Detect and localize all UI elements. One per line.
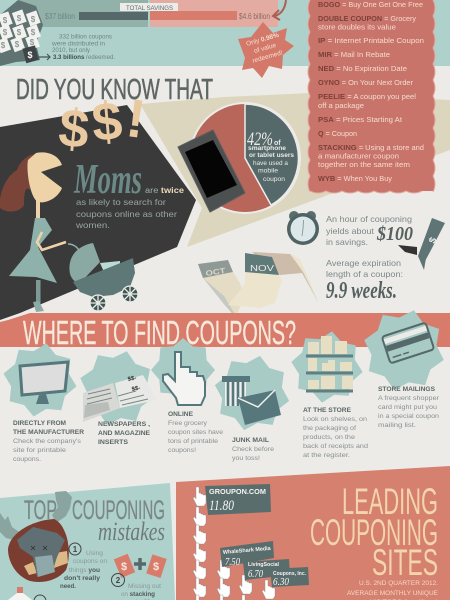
Oct page [203, 272, 244, 316]
illustration: mom [0, 152, 66, 312]
text: THE MANUFACTURER [13, 429, 84, 436]
text: STORE MAILINGS [378, 386, 436, 393]
text: coupons distributed: 3.3 billions redeemed. [53, 54, 115, 61]
text: back of receipts and [303, 443, 368, 450]
hood [69, 243, 100, 283]
foot [33, 301, 44, 312]
left antler [0, 513, 22, 541]
pie text: have used a [253, 161, 289, 167]
icon: trash and envelope [207, 348, 297, 438]
icon: magazine: $$- [127, 376, 137, 383]
glossary text: off a package [318, 101, 364, 110]
subheading [347, 580, 438, 600]
panel: tan backdrop [140, 93, 450, 247]
text: JUNK MAIL [232, 437, 269, 444]
Nov page [228, 272, 282, 308]
value box: Coupons, Inc.: 6.30 [273, 576, 289, 588]
hand bar: Coupons, Inc. [262, 580, 275, 599]
icon: monitor [0, 337, 83, 423]
text: hour of couponing: in savings. [326, 237, 368, 247]
icon: coupon pile: $ [31, 15, 36, 24]
text: the packaging of [303, 425, 356, 432]
value box: WhaleShark Media: 7.50 [225, 556, 240, 568]
mistake 1 [60, 543, 107, 590]
text: you toss! [232, 455, 260, 462]
text: coupons distributed: were distributed in [51, 40, 105, 48]
panel: dark backdrop [0, 105, 196, 320]
icon: coupon pile: $ [3, 16, 8, 25]
mistake 2: Missing out [128, 583, 161, 590]
mistake 2: on stacking [121, 591, 155, 598]
arm [37, 232, 66, 250]
tan mounts [24, 562, 37, 575]
small arrow [37, 54, 50, 60]
icon: coupon pile: $ [30, 38, 35, 47]
text: at the register. [303, 452, 350, 459]
callout: redeemed star: of value [253, 42, 277, 55]
text: hour of couponing: $100 [376, 223, 413, 245]
icon: dollar bill: $ [427, 235, 440, 245]
text: card might put you [378, 404, 437, 411]
pie slice: 42% [245, 104, 298, 205]
card: store mailings [354, 300, 450, 429]
icon: magazine [70, 341, 164, 435]
text: coupon sites have [168, 429, 223, 436]
value box: WhaleShark Media [220, 541, 274, 568]
text [232, 437, 274, 462]
illustration: stroller [68, 243, 138, 311]
heading: dollar signs [56, 88, 149, 160]
subheading: AVERAGE MONTHLY UNIQUE [347, 590, 438, 597]
hand bar: Groupon [193, 487, 206, 600]
text: moms: Moms [73, 157, 142, 203]
leg [36, 280, 40, 304]
redeemed coupon: $ [27, 50, 33, 60]
glossary text: MIR = Mail In Rebate [318, 50, 390, 59]
basket [73, 258, 135, 297]
icon: coupon pile: $ [17, 14, 22, 23]
glossary text: OYNO = On Your Next Order [318, 78, 413, 87]
savings band left [19, 0, 148, 27]
heading: dollar signs: ! [123, 88, 149, 150]
value box: Coupons, Inc. [270, 567, 309, 588]
text: Look on shelves, on [303, 416, 367, 423]
glossary text: a manufacturer coupon [318, 152, 399, 160]
icon: clock [287, 211, 319, 245]
scalloped edges [308, 0, 435, 193]
value label left: $37 billion [45, 12, 75, 21]
arrow to redeemed star [273, 0, 286, 20]
pie chart: 42 percent [189, 102, 301, 214]
text: coupons. [13, 456, 41, 463]
heading: did you know that: DID YOU KNOW THAT [16, 74, 213, 106]
subheading: U.S. 2ND QUARTER 2012. [359, 580, 438, 587]
icon: dollar bill [398, 218, 445, 270]
text: coupons! [168, 447, 196, 454]
dress [9, 218, 57, 283]
text [168, 411, 223, 454]
back page [252, 252, 318, 302]
card: online [151, 338, 223, 454]
mistake 1: need. [60, 583, 76, 590]
mistake 1: things you [69, 567, 100, 574]
panel: top teal band [0, 0, 450, 66]
glossary text: together on the same item [318, 160, 410, 169]
icon: smartphone [178, 130, 245, 212]
savings band right [150, 0, 278, 27]
text: products, on the [303, 434, 355, 441]
text: Free grocery [168, 420, 208, 427]
right antler [52, 491, 72, 523]
icon: pointer hand [151, 338, 215, 405]
text: coupons distributed: 332 billion coupons [59, 34, 112, 40]
pie text: 42% [247, 129, 273, 150]
heading [310, 481, 438, 583]
text: moms: women. [75, 220, 110, 230]
mistake 2 [112, 574, 161, 600]
text [98, 421, 151, 446]
panel: leading couponing sites [176, 466, 450, 600]
hair [0, 154, 36, 212]
heading: mistakes: mistakes [98, 517, 165, 546]
text: moms [73, 157, 185, 230]
plaque [8, 519, 69, 582]
icon: shelves [286, 326, 368, 408]
text: hour of couponing: yields about [326, 226, 375, 236]
text: A frequent shopper [378, 395, 440, 402]
text: site for printable [13, 447, 66, 454]
head [17, 527, 65, 577]
icon: coupon pile [0, 0, 50, 66]
icon: stacking coupons: $ [121, 561, 127, 573]
callout: redeemed star: redeemed! [252, 49, 284, 65]
glossary text: Q = Coupon [318, 129, 357, 138]
blanket [100, 261, 120, 272]
text: INSERTS [98, 439, 129, 446]
glossary text: store doubles its value [318, 22, 396, 32]
glossary text: PSA = Prices Starting At [318, 115, 403, 124]
head [27, 152, 62, 202]
mistake 2: 2 [116, 576, 121, 585]
value box: Coupons, Inc.: Coupons, Inc. [273, 571, 306, 577]
mistake 1: Using [86, 550, 103, 557]
icon: coupon pile: $ [17, 28, 22, 37]
glossary text: IP = Internet Printable Coupon [318, 36, 424, 45]
icon: credit card [354, 300, 450, 400]
text: in a special coupon [378, 413, 439, 420]
hand bar: WhaleShark Media [217, 560, 230, 600]
glossary text: WYB = When You Buy [318, 174, 392, 183]
value box: WhaleShark Media: WhaleShark Media [223, 546, 272, 556]
text: ONLINE [168, 411, 194, 418]
eyes [31, 546, 47, 550]
pie text: mobile [258, 168, 279, 174]
glossary text: BOGO = Buy One Get One Free [318, 0, 423, 9]
text: moms: coupons online as other [76, 209, 177, 219]
value box: LivingSocial: 6.70 [248, 568, 263, 580]
text: coupons distributed [51, 34, 115, 61]
icon: coupon pile: $ [15, 40, 20, 49]
pie text: coupon [263, 177, 285, 183]
heading: dollar signs: $ [90, 91, 125, 153]
text: Check before [232, 446, 274, 453]
text: expiration length: length of a coupon: [326, 269, 403, 279]
text: moms: are twice [145, 186, 185, 195]
total savings bar: $4.6 billion [150, 11, 237, 20]
total savings label: TOTAL SAVINGS [126, 5, 174, 12]
total savings label [120, 3, 178, 12]
text: DIRECTLY FROM [13, 420, 66, 427]
text: Check the company's [13, 438, 82, 445]
value box: LivingSocial: LivingSocial [248, 562, 279, 568]
text: coupons distributed: 2010, but only [52, 47, 91, 54]
value box: Groupon: GROUPON.COM [209, 487, 266, 496]
value box: LivingSocial [243, 559, 290, 580]
glossary text: PEELIE = A coupon you peel [318, 92, 416, 101]
mistake 1: don't really [64, 575, 100, 582]
panel: top couponing mistakes [0, 483, 175, 600]
pie text [247, 129, 294, 183]
hand bar: LivingSocial [239, 575, 252, 600]
total savings bar: $37 billion [79, 12, 148, 20]
value box: Groupon [205, 484, 271, 515]
text [378, 386, 440, 429]
snout [35, 555, 55, 577]
text [303, 407, 368, 459]
glossary text: DOUBLE COUPON = Grocery [318, 14, 416, 23]
panel: top couponing mistakes: COUPONING [72, 495, 165, 525]
icon: magazine: $$- [131, 386, 141, 393]
card: directly from the manufacturer [0, 337, 84, 463]
heading: top couponing: TOP [24, 495, 57, 525]
icon: calendar pages [198, 252, 318, 317]
tab: Oct: OCT [205, 266, 227, 278]
wheels [90, 286, 138, 311]
page shadow [203, 278, 243, 317]
text: AT THE STORE [303, 407, 352, 414]
icon: stacking coupons [114, 554, 167, 578]
callout: redeemed star: Only 0.98% [246, 32, 280, 48]
text: hour of couponing: An hour of couponing [326, 214, 412, 224]
text [13, 420, 84, 463]
text: moms: as likely to search for [76, 197, 166, 207]
icon: stacking coupons: $ [153, 561, 159, 573]
illustration: moose trophy [0, 491, 72, 582]
pie text: or tablet users [249, 152, 294, 159]
neck [36, 198, 40, 220]
mistake 1: 1 [73, 545, 78, 554]
handle [68, 244, 80, 252]
text: expiration length: 9.9 weeks. [326, 278, 397, 304]
card: junk mail [207, 348, 297, 462]
icon: coupon pile: $ [3, 28, 8, 37]
icon: bottle and mistake 3 [8, 587, 46, 600]
pie text: of [274, 140, 281, 147]
glossary text [318, 0, 424, 183]
text: tons of printable [168, 438, 218, 445]
glossary text: NED = No Expiration Date [318, 64, 407, 73]
panel: glossary [308, 0, 435, 193]
pie text: smartphone [248, 145, 286, 152]
text: hour of couponing [326, 214, 413, 247]
card: newspapers and magazine inserts [70, 341, 164, 446]
text: AND MAGAZINE [98, 430, 151, 437]
tab: Nov: NOV [250, 263, 274, 273]
value label right: $4.6 billion [239, 12, 270, 21]
value box: Groupon: 11.80 [209, 498, 234, 514]
text: expiration length [326, 258, 403, 304]
text: NEWSPAPERS , [98, 421, 150, 428]
icon: coupon pile: $ [31, 28, 36, 37]
mistake 1: coupons on [73, 558, 107, 565]
text: expiration length: Average expiration [326, 258, 401, 268]
callout: redeemed star [238, 22, 294, 78]
heading: dollar signs: $ [56, 98, 92, 160]
icon: coupon pile: $ [1, 41, 6, 50]
glossary text: STACKING = Using a store and [318, 143, 424, 152]
card: at the store [286, 326, 368, 459]
text: mailing list. [378, 422, 416, 429]
